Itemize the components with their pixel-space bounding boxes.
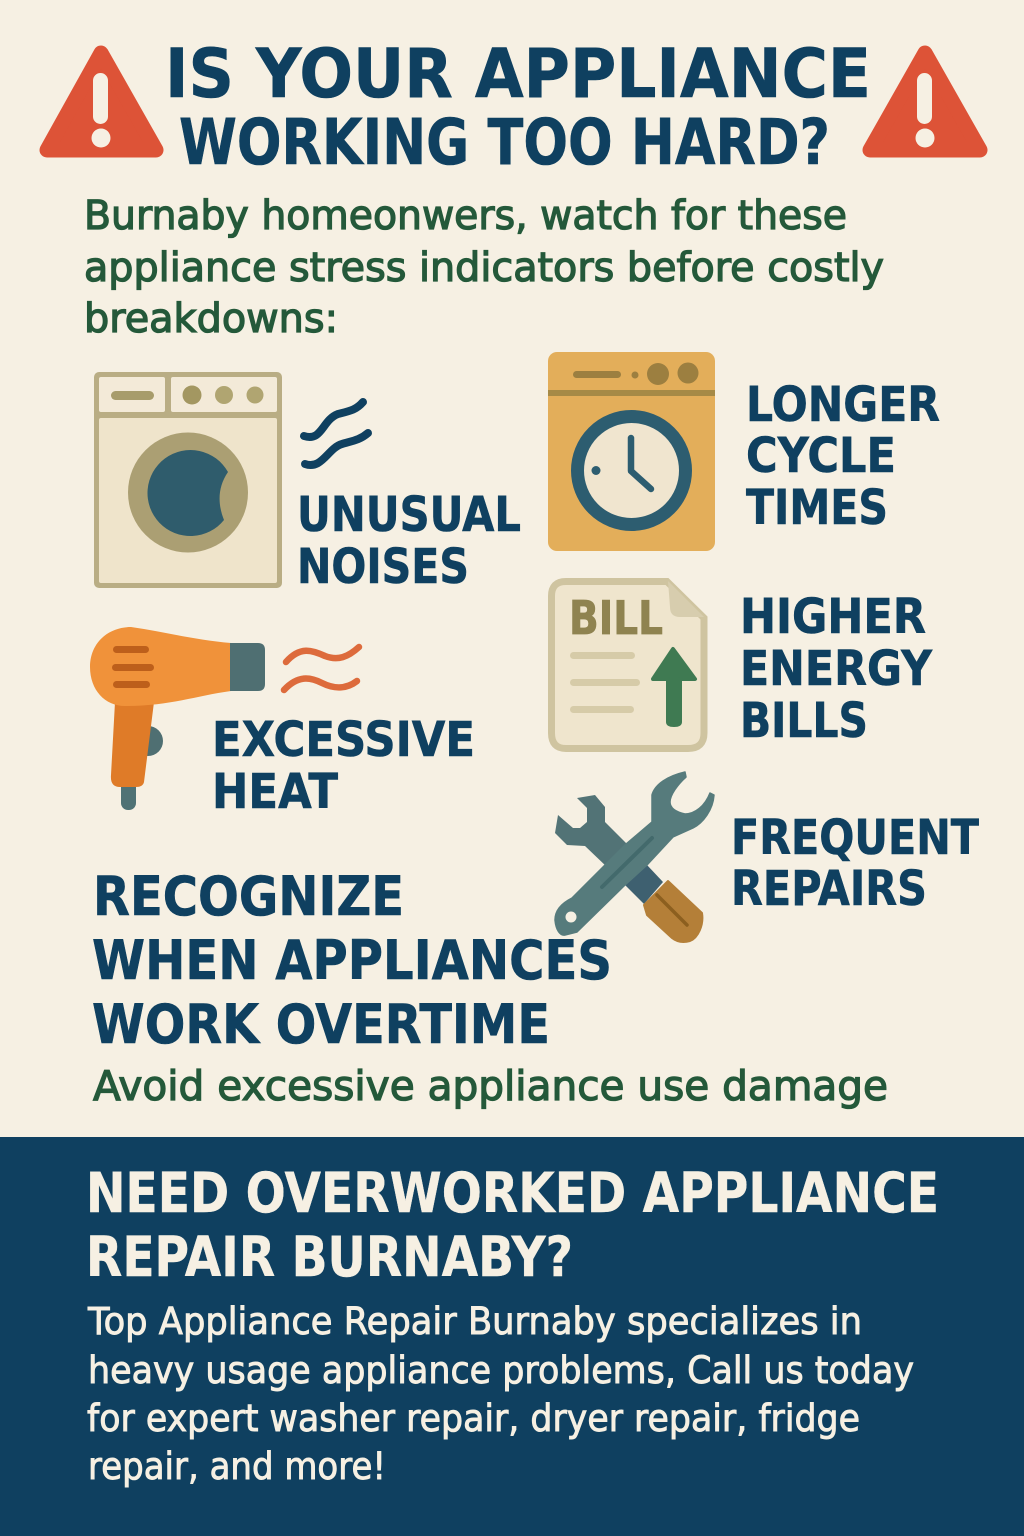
label: higher energy bills: ENERGY [740,641,933,697]
label: longer cycle times: LONGER [746,377,940,433]
subtitle: Burnaby homeonwers, watch for these [84,193,847,239]
icon: right warning triangle [870,53,980,150]
label: frequent repairs: REPAIRS [731,861,927,917]
title [165,35,871,179]
heading: recognize overtime: WORK OVERTIME [92,993,550,1056]
text block: call to action body: Top Appliance Repair Burnaby specializes in [87,1300,862,1343]
label: unusual noises [297,487,521,595]
text block: call to action body: heavy usage appliance problems, Call us today [88,1349,914,1392]
subtitle: breakdowns: [84,296,338,342]
icon: heat waves [284,647,359,690]
icon: washing machine [94,372,282,588]
text block: call to action body: for expert washer repair, dryer repair, fridge [87,1397,860,1440]
icon: energy bill [552,581,704,748]
label: excessive heat: HEAT [212,764,338,820]
heading: need repair: REPAIR BURNABY? [86,1225,573,1289]
subtitle: appliance stress indicators before costly [84,245,884,291]
label: excessive heat: EXCESSIVE [212,712,475,768]
label: longer cycle times: TIMES [746,480,888,536]
label: frequent repairs [731,810,979,917]
icon: noise waves [304,402,368,465]
heading: recognize overtime: WHEN APPLIANCES [92,929,612,992]
icon: energy bill: BILL [569,591,663,645]
label: unusual noises: NOISES [297,539,469,595]
heading: recognize overtime: RECOGNIZE [93,865,404,928]
text block: call to action body [87,1300,914,1488]
label: longer cycle times: CYCLE [746,428,896,484]
title: WORKING TOO HARD? [179,106,830,179]
panel: call to action [0,1137,1024,1536]
text block: call to action body: repair, and more! [88,1445,386,1488]
subtitle [84,193,884,342]
icon: hair dryer [90,627,265,810]
label: excessive heat [212,712,475,820]
icon: left warning triangle [47,53,156,150]
label: frequent repairs: FREQUENT [731,810,979,866]
label: unusual noises: UNUSUAL [297,487,521,543]
heading: recognize overtime [92,865,612,1056]
icon: crossed wrenches [555,772,714,942]
title: IS YOUR APPLIANCE [165,35,871,114]
subheading: avoid damage: Avoid excessive appliance use damage [93,1062,888,1110]
label: higher energy bills: HIGHER [740,589,926,645]
label: higher energy bills [740,589,933,749]
label: longer cycle times [746,377,940,536]
heading: need repair [86,1161,939,1289]
label: higher energy bills: BILLS [740,693,868,749]
icon: clock appliance [548,352,715,551]
